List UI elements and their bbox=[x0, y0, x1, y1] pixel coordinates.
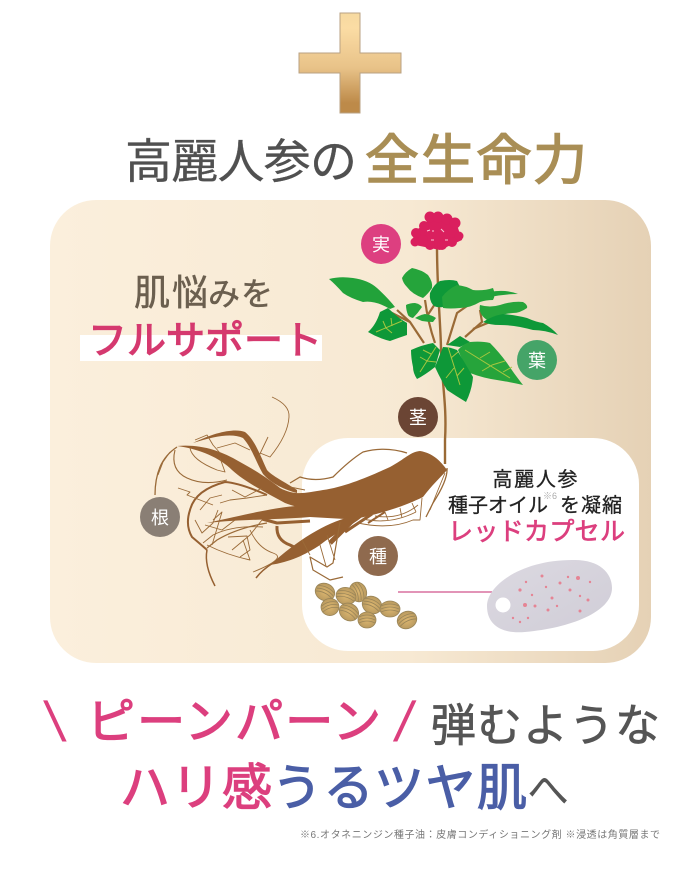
slogan: line two: うるツヤ肌 bbox=[272, 760, 527, 816]
leaves bbox=[329, 268, 558, 402]
capsule text: レッドカプセル bbox=[448, 518, 625, 546]
capsule text: を凝縮 bbox=[560, 494, 622, 517]
slogan: line one: \ bbox=[41, 690, 69, 753]
title: 全生命力 bbox=[365, 131, 587, 191]
root bbox=[155, 397, 447, 586]
heading: skin support bbox=[80, 272, 322, 363]
capsule text: ※6 bbox=[543, 491, 557, 501]
capsule highlight bbox=[496, 598, 510, 612]
badge: stem: 茎 bbox=[409, 408, 427, 428]
badge: fruit bbox=[361, 224, 401, 264]
slogan: line one: 弾むような bbox=[431, 700, 660, 751]
capsule illustration bbox=[487, 560, 612, 632]
footnote: ※6.オタネニンジン種子油：皮膚コンディショニング剤 ※浸透は角質層まで bbox=[300, 828, 660, 841]
badge: stem bbox=[398, 397, 438, 437]
slogan: line two: へ bbox=[527, 767, 569, 814]
title bbox=[125, 131, 587, 191]
heading: skin support: みを bbox=[208, 276, 273, 312]
stem bbox=[437, 246, 445, 464]
seeds bbox=[312, 580, 420, 632]
badge: root bbox=[140, 497, 180, 537]
badge: leaf bbox=[517, 340, 557, 380]
icon: gold plus bbox=[299, 13, 401, 113]
badge: seed: 種 bbox=[369, 547, 387, 567]
heading: skin support: フルサポート bbox=[88, 320, 322, 363]
slogan: line one bbox=[41, 690, 660, 753]
connector line bbox=[398, 591, 492, 593]
slogan: line two bbox=[120, 760, 569, 816]
panel: background bbox=[50, 200, 651, 663]
branches bbox=[390, 300, 490, 345]
capsule text: 高麗人参 bbox=[492, 468, 578, 491]
capsule text bbox=[448, 468, 625, 546]
badge: fruit: 実 bbox=[372, 235, 390, 255]
title: 高麗人参の bbox=[125, 135, 357, 188]
slogan: line one: / bbox=[391, 690, 419, 753]
slogan: line two: ハリ感 bbox=[120, 760, 272, 816]
capsule text: 種子オイル bbox=[448, 494, 548, 517]
heading: skin support: 肌悩 bbox=[134, 272, 208, 313]
illustration: ginseng plant bbox=[155, 212, 558, 586]
badge: leaf: 葉 bbox=[528, 351, 546, 371]
badge: root: 根 bbox=[151, 508, 169, 528]
panel: capsule inset bbox=[302, 438, 639, 651]
berries bbox=[410, 212, 464, 250]
badge: seed bbox=[358, 536, 398, 576]
slogan: line one: ピーンパーン bbox=[87, 696, 381, 749]
